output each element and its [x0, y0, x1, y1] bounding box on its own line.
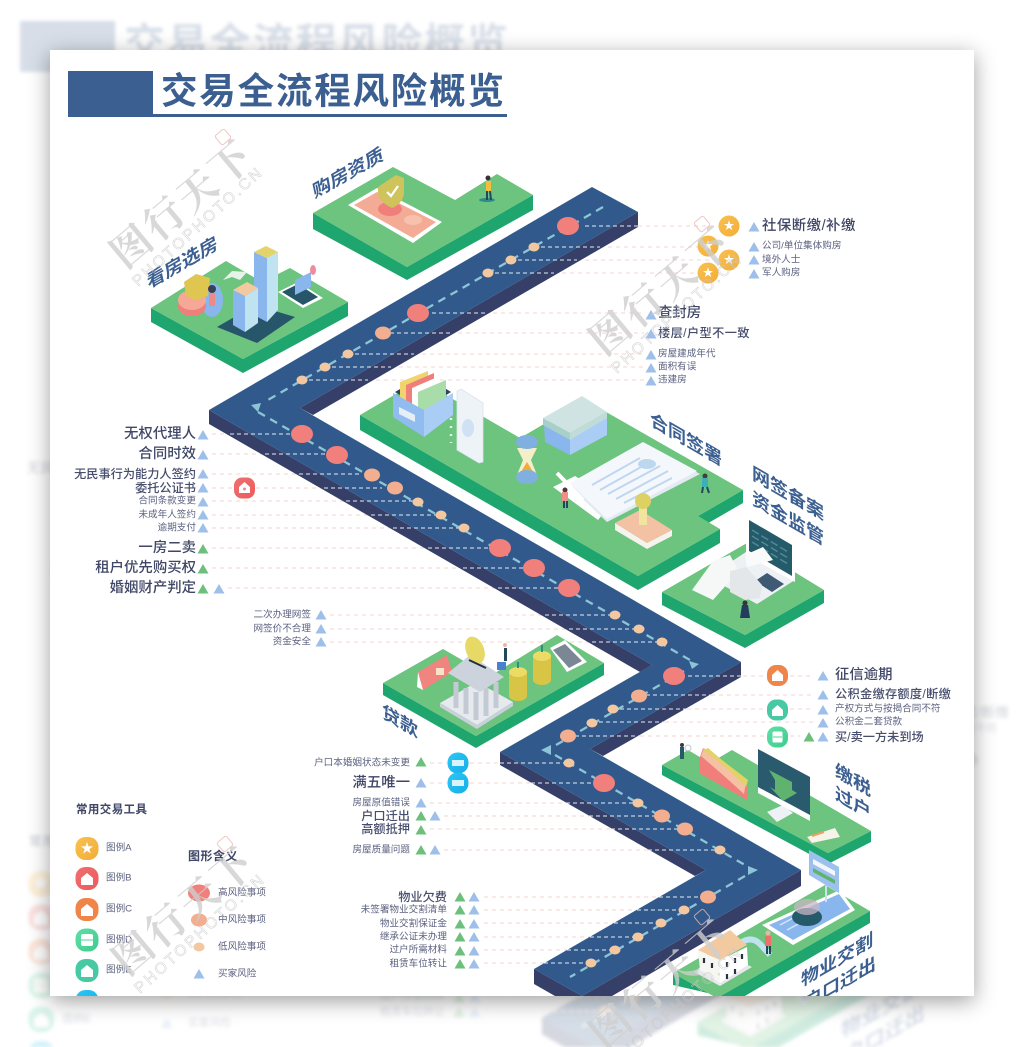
legend: common tools — [76, 802, 147, 1013]
infographic content — [68, 70, 951, 1015]
left labels: handover — [361, 889, 480, 970]
right labels: qualification — [748, 216, 856, 278]
platform labels: 物业交割 — [801, 929, 873, 992]
platform labels: 购房资质 — [311, 143, 385, 203]
right labels: qualification: 社保断缴/补缴 — [762, 216, 856, 234]
platform labels: 户口迁出 — [804, 952, 876, 1015]
right labels: viewing: 楼层/户型不一致 — [658, 325, 750, 340]
right labels: loan: 公积金缴存额度/断缴 — [835, 686, 951, 701]
left labels: contract: 租户优先购买权 — [95, 559, 196, 576]
left labels: handover: 租赁车位转让 — [389, 958, 447, 970]
watermark 3: PHOTOPHOTO.CN — [131, 870, 269, 997]
left labels: contract: 合同时效 — [138, 445, 196, 462]
left labels: contract: 合同条款变更 — [138, 494, 196, 506]
right labels: qualification: 军人购房 — [762, 266, 800, 278]
watermark 1: 图行天下 — [96, 125, 264, 279]
left labels: contract: 委托公证书 — [135, 480, 196, 495]
icon group: star tools — [698, 216, 740, 284]
right labels: qualification: 公司/单位集体购房 — [762, 240, 841, 252]
icons: right tools — [767, 665, 788, 748]
legend: common tools: 常用交易工具 — [76, 802, 147, 816]
labels: online filing: 网签价不合理 — [253, 622, 311, 634]
left labels: contract: 逾期支付 — [158, 522, 196, 534]
right labels: viewing: 违建房 — [658, 374, 687, 386]
legend: common tools: ★ — [80, 840, 94, 856]
left labels: contract: 一房二卖 — [138, 539, 196, 556]
platform labels — [145, 143, 876, 1015]
left labels: tax: 户口迁出 — [361, 808, 410, 823]
right labels: loan: 买/卖一方未到场 — [835, 729, 924, 744]
platform labels: 贷款 — [382, 701, 418, 743]
left labels: tax: 满五唯一 — [352, 773, 410, 791]
labels: online filing — [253, 608, 326, 648]
left labels: contract — [74, 425, 224, 596]
watermark 1: PHOTOPHOTO.CN — [129, 163, 267, 290]
right labels: loan: 征信逾期 — [835, 666, 893, 683]
icon group: star tools: ★ — [702, 240, 714, 252]
panel: property handover platform — [673, 885, 870, 1000]
legend: shape meanings: 买家风险 — [218, 968, 257, 980]
legend: common tools: 图例E — [106, 964, 132, 976]
left labels: contract: 无权代理人 — [124, 425, 196, 442]
left labels: handover: 继承公证未办理 — [380, 930, 447, 942]
legend: common tools: 图例D — [106, 934, 132, 946]
panel: tax platform — [662, 743, 871, 864]
panel: online filing platform — [662, 515, 824, 648]
legend: common tools: 图例A — [106, 842, 132, 854]
panel: contract signing platform — [360, 371, 743, 590]
left labels: handover: 物业交割保证金 — [380, 918, 447, 930]
labels: online filing: 资金安全 — [273, 636, 311, 648]
left labels: tax — [314, 756, 440, 856]
left labels: contract: 未成年人签约 — [138, 508, 196, 520]
right labels: viewing: 面积有误 — [658, 360, 697, 372]
right labels: loan — [804, 666, 951, 744]
left labels: contract: 无民事行为能力人签约 — [74, 466, 196, 481]
panel: qualification platform — [313, 167, 533, 280]
labels: online filing: 二次办理网签 — [253, 608, 311, 620]
platform labels: 资金监管 — [752, 487, 824, 550]
right labels: loan: 公积金二套贷款 — [835, 716, 903, 728]
leader lines on white — [212, 226, 814, 963]
platform labels: 网签备案 — [752, 462, 824, 525]
legend: shape meanings: 高风险事项 — [218, 886, 266, 898]
panel: loan platform — [383, 634, 604, 748]
watermark 3: 图行天下 — [98, 832, 266, 986]
leader lines on road — [230, 226, 743, 963]
icons: cyan tickets — [448, 752, 468, 794]
panel: house viewing platform — [151, 246, 348, 373]
right labels: viewing: 查封房 — [658, 304, 701, 321]
left labels: handover: 过户所需材料 — [389, 944, 447, 956]
left labels: tax: 房屋质量问题 — [352, 844, 410, 856]
title band: 交易全流程风险概览 — [161, 70, 506, 112]
right labels: viewing — [646, 304, 750, 386]
platform labels: 缴税 — [835, 760, 871, 802]
right labels: loan: 产权方式与按揭合同不符 — [835, 702, 941, 714]
risk dots — [291, 217, 726, 968]
legend: shape meanings: 低风险事项 — [218, 940, 266, 952]
legend: shape meanings — [188, 848, 266, 980]
icon group: star tools: ★ — [724, 220, 734, 232]
right labels: viewing: 房屋建成年代 — [658, 348, 716, 360]
icon group: star tools: ★ — [702, 267, 714, 279]
legend: shape meanings: 中风险事项 — [218, 914, 266, 926]
sign post between tax and handover — [809, 850, 839, 902]
left labels: handover: 物业欠费 — [398, 889, 447, 904]
left labels: contract: 婚姻财产判定 — [110, 578, 196, 596]
legend: common tools: 图例C — [106, 902, 132, 914]
left labels: tax: 高额抵押 — [361, 821, 410, 836]
icon group: star tools: ★ — [724, 254, 734, 266]
icon: red house tool — [234, 478, 255, 498]
left labels: handover: 未签署物业交割清单 — [361, 904, 447, 916]
left labels: tax: 户口本婚姻状态未变更 — [314, 756, 410, 768]
title band — [68, 70, 507, 117]
platform labels: 看房选房 — [145, 233, 220, 293]
platform labels: 过户 — [835, 782, 871, 824]
platform labels: 合同签署 — [650, 409, 722, 471]
legend: shape meanings: 图形含义 — [188, 848, 238, 863]
left labels: tax: 房屋原值错误 — [352, 796, 410, 808]
road centre dashes and arrows — [251, 207, 758, 977]
road — [209, 187, 801, 996]
right labels: qualification: 境外人士 — [762, 254, 801, 266]
watermark 2: PHOTOPHOTO.CN — [608, 250, 746, 377]
watermark 2: 图行天下 — [575, 212, 743, 366]
legend: common tools: 图例B — [106, 872, 132, 884]
